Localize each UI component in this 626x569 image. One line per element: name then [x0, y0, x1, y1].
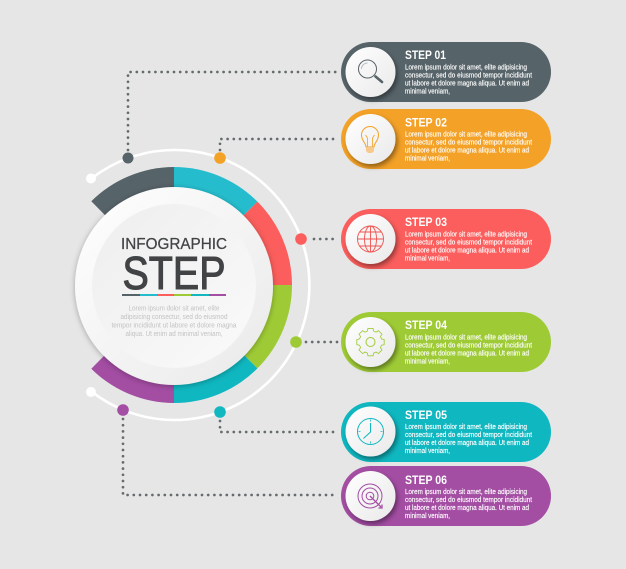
panel: step 02: Lorem ipsum dolor sit amet, elite adipisicing	[405, 132, 527, 138]
panel: step 02	[341, 109, 551, 169]
panel: step 04	[341, 312, 551, 372]
panel: step 03: minimal veniam,	[405, 256, 450, 262]
panel: step 01: Lorem ipsum dolor sit amet, elite adipisicing	[405, 64, 527, 72]
central description: aliqua. Ut enim ad minimal veniam,	[126, 331, 223, 338]
central description: adipisicing consectur, sed do eiusmod	[120, 314, 228, 321]
panel: step 04: ut labore et dolore magna aliqua. Ut enim ad	[405, 350, 529, 358]
panel: step 03: STEP 03	[405, 215, 447, 229]
central description	[112, 306, 237, 338]
thin white outer ring	[92, 150, 309, 420]
icon: magnifier	[346, 47, 396, 97]
panel: step 01: STEP 01	[405, 48, 446, 62]
dotted connector: step 05	[220, 421, 338, 432]
panel: step 05: Lorem ipsum dolor sit amet, elite adipisicing	[405, 424, 527, 431]
panel: step 04: minimal veniam,	[405, 358, 450, 366]
panel: step 05: consectur, sed do eiusmod tempor incididunt	[405, 432, 532, 439]
panel: step 06: consectur, sed do eiusmod tempor incididunt	[405, 497, 532, 504]
panel: step 06	[341, 466, 551, 526]
dotted connector: step 03	[314, 238, 338, 240]
title: INFOGRAPHIC: INFOGRAPHIC	[121, 236, 227, 253]
central white disc	[75, 187, 273, 385]
central description: tempor incididunt ut labore et dolore magna	[112, 322, 237, 330]
icon: light bulb	[346, 114, 396, 164]
ring end caps	[86, 174, 96, 397]
panel: step 05	[341, 402, 551, 462]
panel: step 06: ut labore et dolore magna aliqua. Ut enim ad	[405, 505, 529, 512]
panel: step 05: STEP 05	[405, 408, 447, 422]
icon: clock	[346, 406, 396, 456]
panel: step 02: STEP 02	[405, 116, 447, 130]
panel: step 06: Lorem ipsum dolor sit amet, elite adipisicing	[405, 489, 527, 496]
panel: step 06: STEP 06	[405, 473, 447, 487]
panel: step 01: consectur, sed do eiusmod tempor incididunt	[405, 72, 532, 80]
panel: step 06: minimal veniam,	[405, 513, 450, 520]
icon: gear	[346, 317, 396, 367]
icon: target	[346, 471, 396, 521]
title underline	[122, 294, 226, 296]
dotted connector: step 04	[306, 341, 338, 343]
dotted connector: step 02	[220, 139, 338, 150]
dotted connector: step 06	[123, 419, 338, 495]
panel: step 04: STEP 04	[405, 318, 447, 332]
dotted connector: step 01	[128, 72, 336, 150]
icon: globe	[346, 214, 396, 264]
panel: step 01: minimal veniam,	[405, 88, 450, 96]
panel: step 04: Lorem ipsum dolor sit amet, elite adipisicing	[405, 334, 527, 342]
panel: step 01	[341, 42, 551, 102]
panel: step 04: consectur, sed do eiusmod tempor incididunt	[405, 342, 532, 350]
panel: step 03	[341, 209, 551, 269]
panel: step 02: minimal veniam,	[405, 156, 450, 162]
panel: step 03: Lorem ipsum dolor sit amet, elite adipisicing	[405, 232, 527, 238]
panel: step 05: ut labore et dolore magna aliqua. Ut enim ad	[405, 440, 529, 447]
segmented colour arc	[91, 167, 292, 403]
panel: step 01: ut labore et dolore magna aliqua. Ut enim ad	[405, 80, 529, 88]
central description: Lorem ipsum dolor sit amet, elite	[128, 306, 220, 312]
panel: step 02: consectur, sed do eiusmod tempor incididunt	[405, 140, 532, 146]
panel: step 03: ut labore et dolore magna aliqua. Ut enim ad	[405, 248, 529, 254]
panel: step 05: minimal veniam,	[405, 448, 450, 455]
ring marker dots	[117, 152, 307, 418]
panel: step 03: consectur, sed do eiusmod tempor incididunt	[405, 240, 532, 246]
panel: step 02: ut labore et dolore magna aliqua. Ut enim ad	[405, 148, 529, 154]
title: STEP: STEP	[122, 247, 226, 299]
